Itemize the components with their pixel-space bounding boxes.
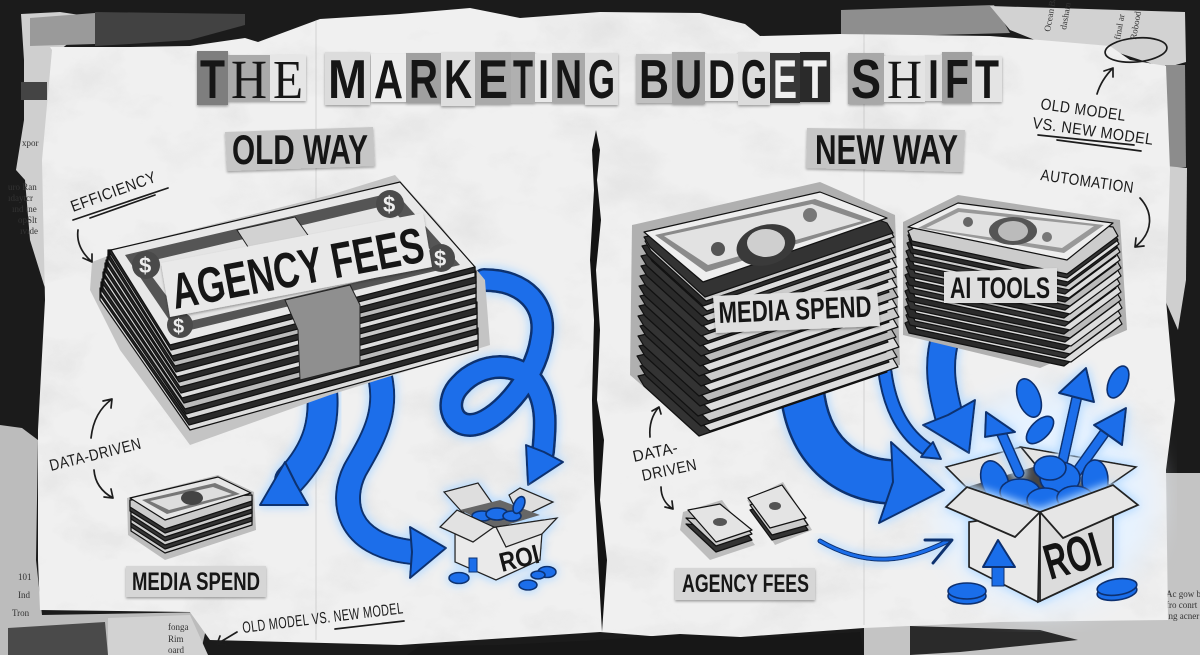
title letters: E [273, 49, 303, 110]
newspaper scraps behind the page: xpor [22, 138, 38, 148]
arrow: agency fees thin to ROI [820, 540, 952, 563]
ROI glow [935, 390, 1155, 610]
arrow: AI tools to ROI [923, 335, 975, 453]
newspaper scraps behind the page: ıvıde [20, 226, 38, 236]
title letters: I [928, 48, 939, 110]
note: old model vs new model bottom [217, 600, 404, 645]
title letters: T [513, 48, 533, 110]
stacked bills [637, 197, 899, 436]
centre tear [590, 130, 607, 632]
top bill: $ [434, 246, 446, 271]
heading: old way: OLD WAY [232, 126, 368, 173]
label: agency fees [161, 213, 432, 320]
label: media spend: MEDIA SPEND [132, 568, 260, 596]
newspaper scraps behind the page: Robood [1128, 10, 1143, 40]
note: efficiency [69, 169, 168, 262]
box body [946, 485, 1138, 602]
title letters: N [555, 48, 582, 110]
note: old model vs new model top: VS. NEW MODEL [1031, 115, 1155, 149]
media spend money stack [630, 182, 900, 436]
panel: old way [48, 169, 563, 645]
newspaper scraps behind the page: final ar [1112, 13, 1126, 40]
top bill: $ [173, 316, 184, 338]
label: media spend [126, 566, 266, 597]
note: data-driven [48, 399, 143, 498]
newspaper scraps behind the page: fro conrt [1166, 600, 1198, 610]
label: media spend: MEDIA SPEND [718, 291, 872, 330]
title letters [200, 48, 999, 110]
arrow: media spend big to ROI [802, 390, 944, 523]
title letters: E [478, 48, 508, 110]
label: AI tools: AI TOOLS [950, 272, 1050, 305]
letter cards [197, 51, 1002, 106]
top bill with portrait [644, 192, 887, 282]
top bill: $ [139, 253, 151, 278]
box up arrow [983, 540, 1015, 586]
title letters: H [887, 49, 922, 110]
heading: new way: NEW WAY [815, 126, 958, 173]
bottom tear [407, 632, 864, 655]
title letters: A [374, 48, 403, 110]
newspaper scraps behind the page: dasham [1058, 2, 1073, 30]
note: efficiency: EFFICIENCY [69, 169, 159, 216]
top bill: $ [383, 192, 395, 217]
floor coins [948, 576, 1138, 604]
title letters: B [639, 48, 669, 110]
panel: new way [630, 35, 1168, 610]
stacked bills [100, 250, 478, 430]
small ROI box [440, 483, 557, 590]
paper band [237, 217, 360, 380]
title letters: D [708, 48, 735, 110]
label: agency fees: AGENCY FEES [167, 217, 429, 320]
top bill with portrait [908, 203, 1113, 260]
title letters: S [851, 48, 881, 110]
title letters: T [975, 48, 999, 110]
title letters: G [588, 48, 615, 110]
title letters: I [538, 48, 549, 110]
note: automation: AUTOMATION [1039, 167, 1135, 197]
arrow: loop to ROI [451, 280, 563, 485]
note: old model vs new model top: OLD MODEL [1039, 96, 1127, 125]
newspaper scraps behind the page: opSlt [18, 215, 38, 225]
box back flaps [946, 447, 1136, 512]
title letters: M [328, 48, 367, 110]
title letters: R [409, 48, 438, 110]
ROI label: ROI [1038, 521, 1107, 591]
newspaper scraps behind the page: 101 [18, 572, 32, 582]
note: automation [1039, 167, 1150, 247]
label: AI tools [944, 268, 1057, 305]
spilled coins [449, 566, 556, 590]
title letters: H [231, 49, 267, 110]
arrow: fees to media spend [260, 375, 323, 505]
title letters: T [200, 48, 225, 110]
title letters: F [945, 48, 969, 110]
note: data-driven: DRIVEN [640, 457, 699, 485]
up arrows [985, 368, 1126, 480]
AI tools money stack [903, 195, 1127, 368]
label: agency fees [675, 568, 815, 600]
title letters: U [675, 48, 702, 110]
top left torn strip [30, 12, 245, 46]
title letters: T [803, 48, 827, 110]
newspaper scraps behind the page: uro Ran [8, 182, 37, 192]
stacked bills [905, 207, 1122, 366]
title [197, 48, 1002, 110]
title letters: E [773, 48, 797, 110]
note: data-driven [631, 407, 699, 509]
agency fees money stack [90, 175, 490, 445]
top bill [111, 182, 475, 345]
small ROI box: ROI [496, 539, 542, 578]
media spend small stack [127, 475, 256, 560]
arrow: media spend thin to ROI [885, 372, 941, 459]
newspaper scraps behind the page: oard [168, 645, 184, 655]
newspaper scraps behind the page: ıdaytcr [8, 193, 33, 203]
title letters: K [444, 48, 472, 110]
coin pile [975, 456, 1108, 512]
note: old model vs new model top [1031, 35, 1168, 151]
note: data-driven: DATA-DRIVEN [48, 436, 143, 475]
arrow: fees to ROI [348, 366, 446, 578]
newspaper scraps behind the page: Ind [18, 590, 30, 600]
label: agency fees: AGENCY FEES [682, 570, 809, 598]
title letters: G [741, 48, 767, 110]
big ROI box [946, 363, 1138, 604]
newspaper scraps behind the page: fonga [168, 622, 188, 632]
flying coins [1012, 363, 1133, 448]
coins inside [472, 495, 527, 521]
agency fees small stacks [680, 482, 812, 560]
note: data-driven: DATA- [631, 440, 680, 466]
note: old model vs new model bottom: OLD MODEL VS. NEW MODEL [241, 600, 404, 637]
newspaper scraps behind the page: Rim [168, 634, 184, 644]
newspaper scraps behind the page: ıng acner [1166, 611, 1199, 621]
newspaper scraps behind the page: Tron [12, 608, 30, 618]
newspaper scraps behind the page: ınd ıne [12, 204, 37, 214]
